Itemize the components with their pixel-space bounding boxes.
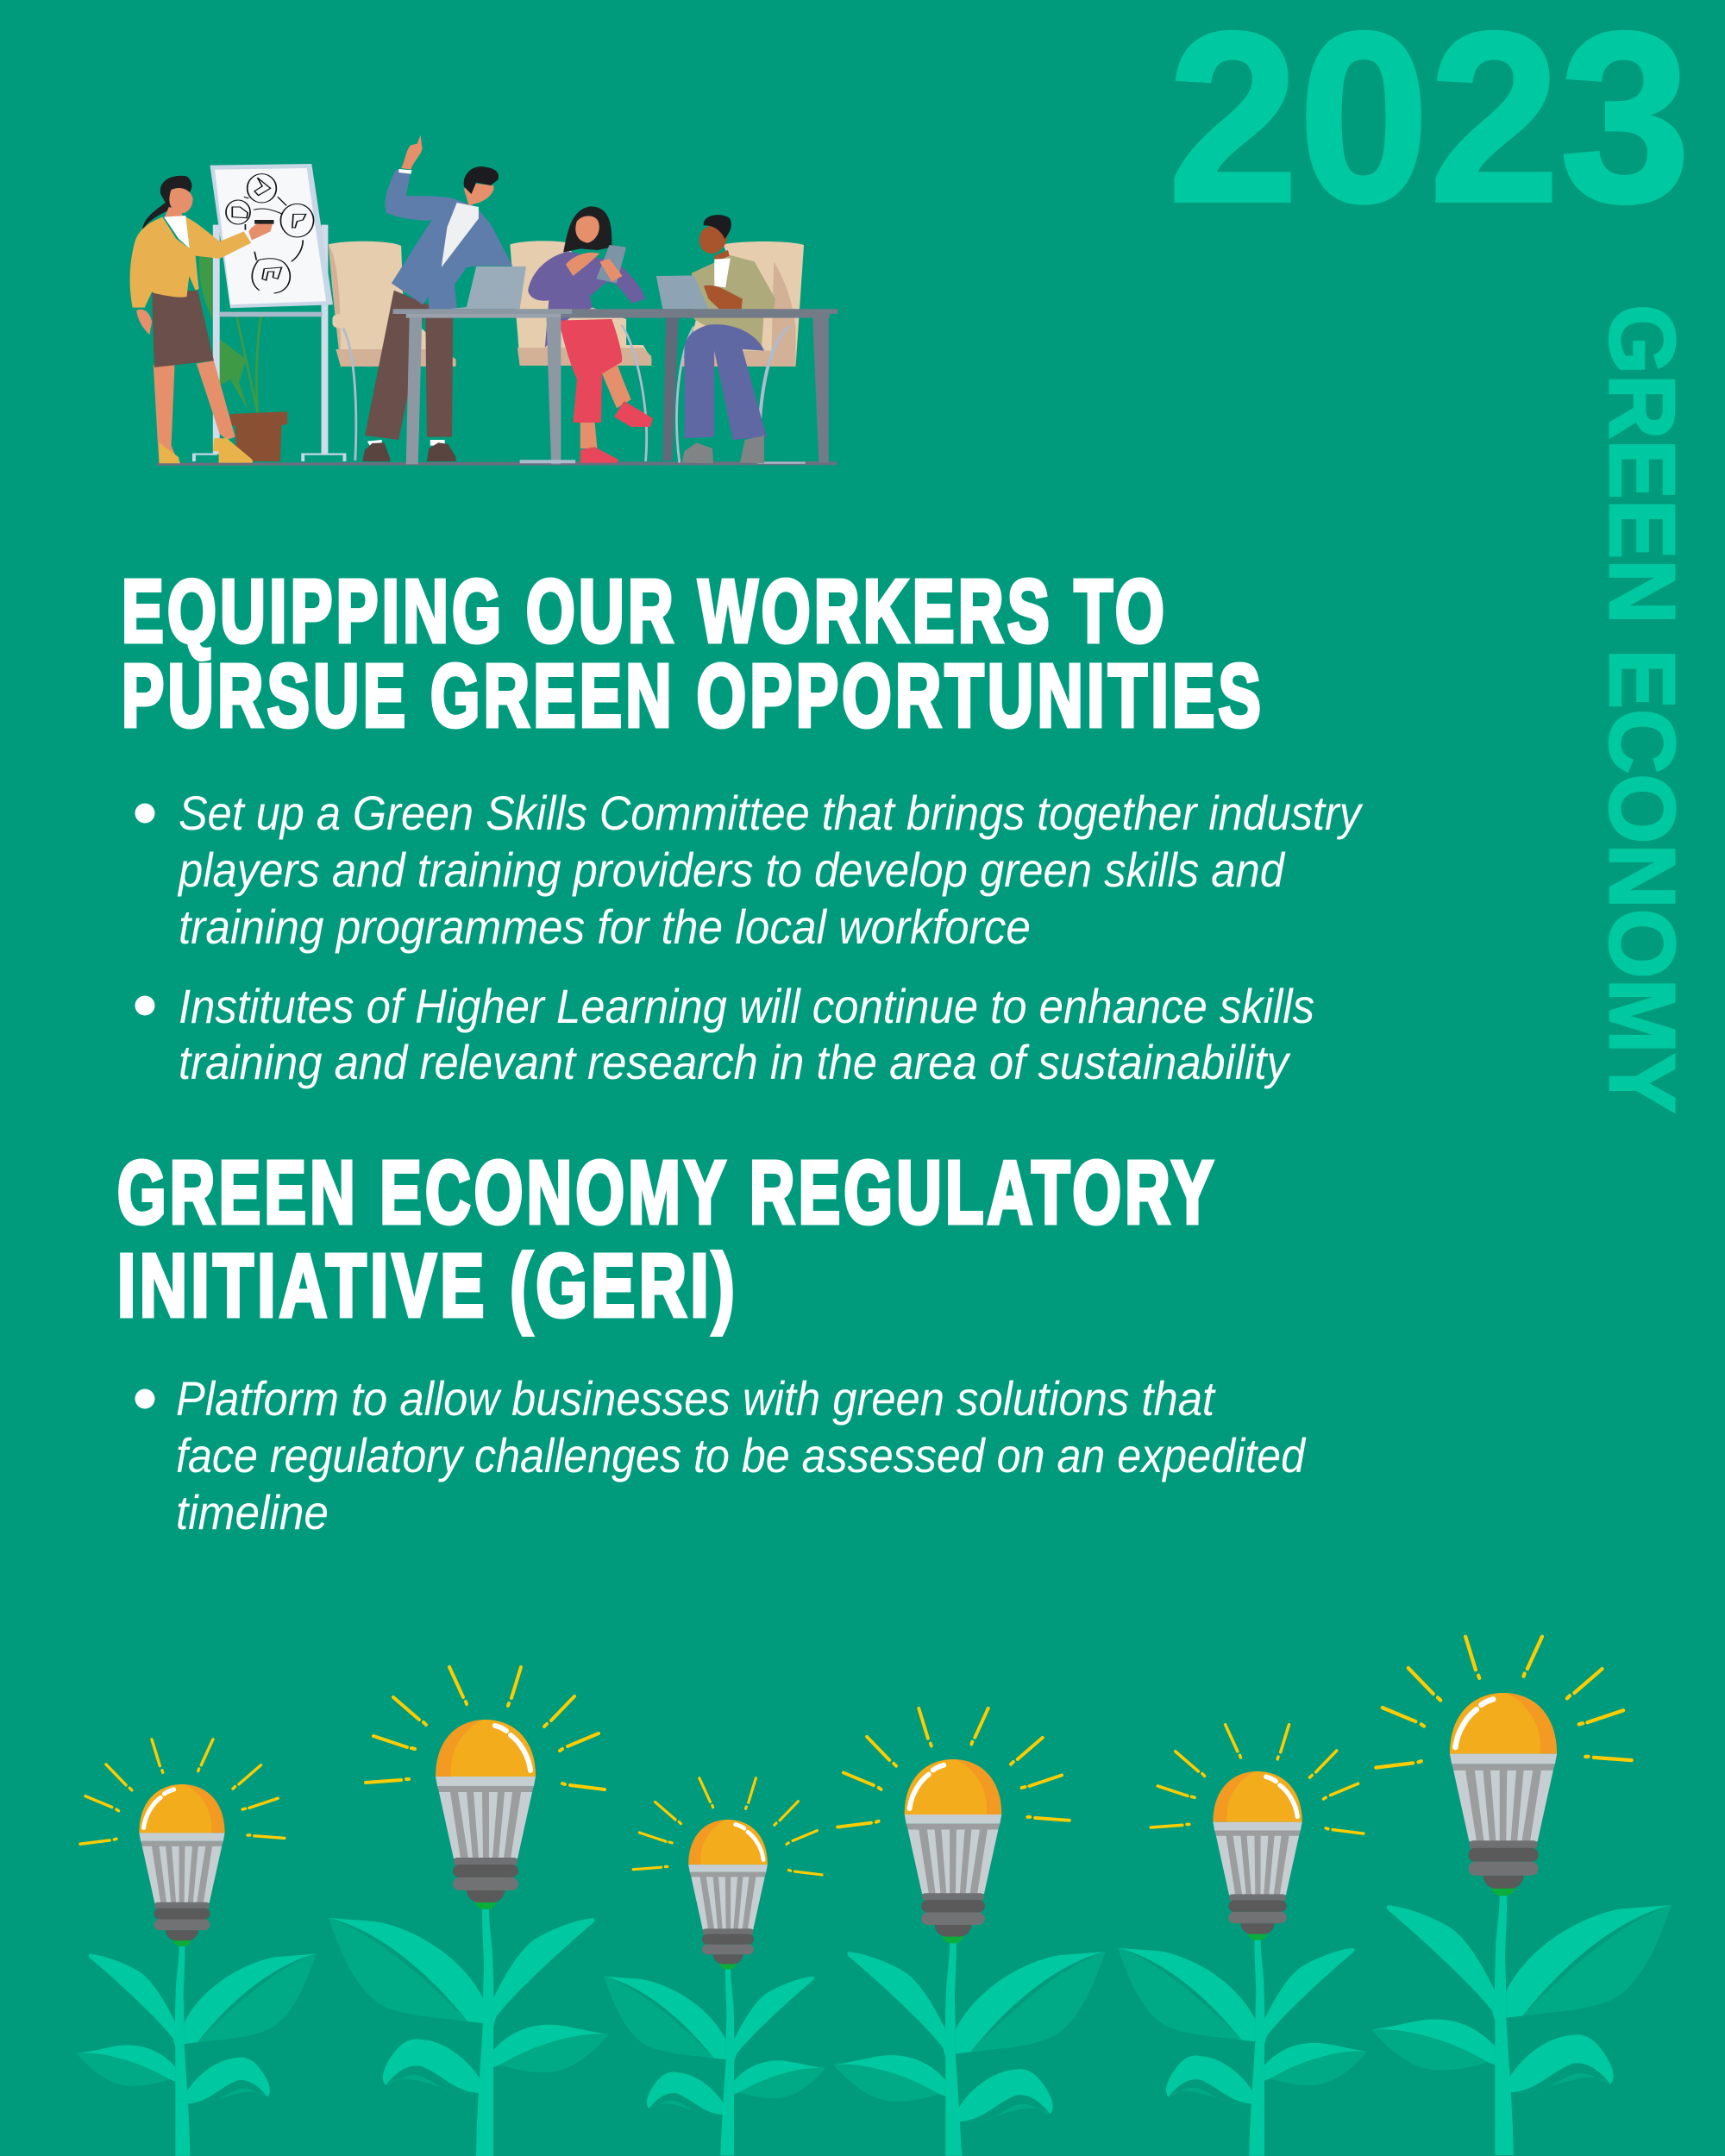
heading: equipping our workers [122, 561, 1264, 745]
potted plant [199, 256, 287, 461]
heading: equipping our workers: PURSUE GREEN OPPORTUNITIES [122, 646, 1264, 745]
heading: equipping our workers: EQUIPPING OUR WORKERS TO [122, 561, 1168, 661]
lightbulb plant 1 [77, 1739, 317, 2156]
person: presenter [130, 176, 274, 463]
vertical title: green economy: GREEN ECONOMY [1590, 304, 1695, 1113]
bullet: green skills committee: Set up a Green Skills Committee that brings together industry [179, 786, 1364, 840]
illustration: office team meeting [130, 135, 837, 466]
bullet: green skills committee [135, 786, 1364, 954]
lightbulb plant 4 [833, 1708, 1106, 2156]
heading: green economy regulatory initiative [117, 1143, 1217, 1335]
bullet: platform [135, 1371, 1307, 1539]
flipchart diagram [226, 174, 314, 293]
bullet: institutes of higher learning: training and relevant research in the area of sustainability [179, 1035, 1291, 1089]
lightbulb plant 5 [1118, 1725, 1367, 2156]
person: woman with tablet [528, 206, 653, 463]
laptops [449, 266, 708, 309]
person: man pointing up [362, 135, 512, 461]
bullet: platform: face regulatory challenges to be assessed on an expedited [176, 1428, 1307, 1482]
person: seated man [682, 215, 775, 463]
lightbulb plant 3 [604, 1778, 825, 2155]
bullet: green skills committee: players and training providers to develop green skills and [177, 843, 1286, 897]
floor shadow [157, 461, 837, 466]
lightbulb plant 2 [329, 1667, 609, 2156]
bullet: platform: timeline [176, 1485, 329, 1539]
bullet: green skills committee: training programmes for the local workforce [179, 899, 1031, 954]
heading: green economy regulatory initiative: INITIATIVE (GERI) [117, 1236, 738, 1335]
bullet: institutes of higher learning: Institutes of Higher Learning will continue to enhance skills [179, 979, 1314, 1033]
lightbulb plant 6 [1371, 1637, 1672, 2155]
table [393, 309, 837, 464]
heading: green economy regulatory initiative: GREEN ECONOMY REGULATORY [117, 1143, 1217, 1242]
bullet: institutes of higher learning [135, 979, 1314, 1089]
flipchart [194, 164, 344, 461]
chairs [329, 241, 806, 463]
bullet: platform: Platform to allow businesses with green solutions that [176, 1371, 1216, 1426]
